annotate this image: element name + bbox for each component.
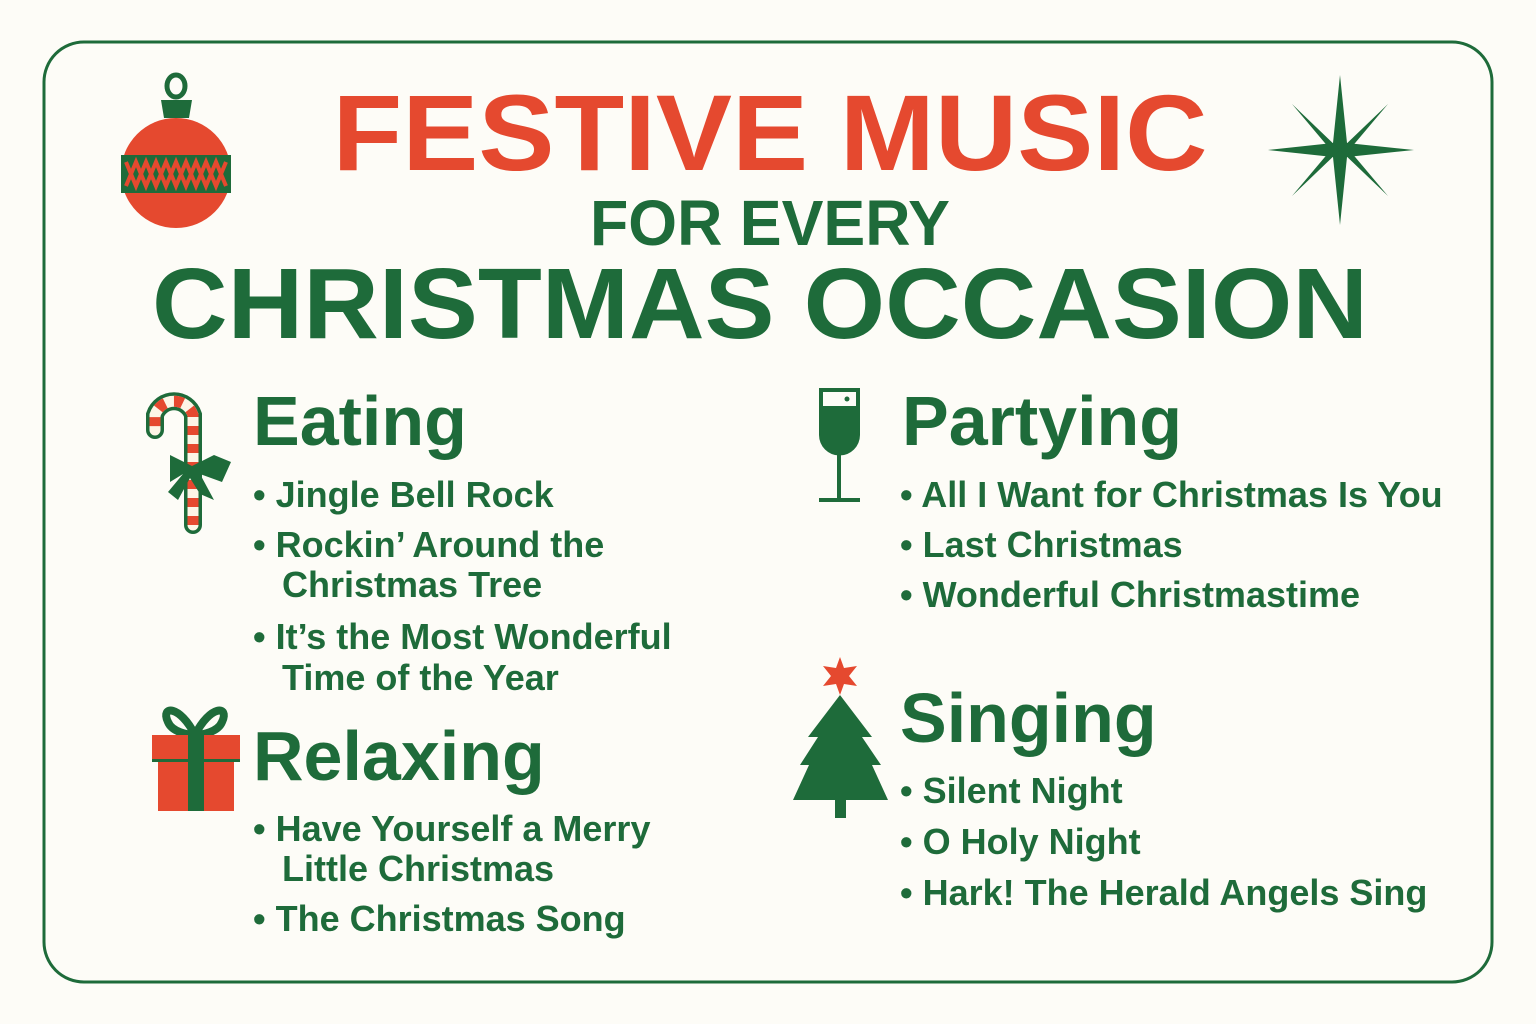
section: Relaxing: • Have Yourself a Merry (253, 808, 650, 849)
section: Partying: • Last Christmas (900, 524, 1183, 565)
title (152, 72, 1368, 360)
section: Eating: Time of the Year (282, 657, 559, 698)
section: Relaxing: • The Christmas Song (253, 898, 626, 939)
section: Eating (253, 382, 672, 698)
section: Relaxing: Relaxing (253, 717, 545, 795)
title: FESTIVE MUSIC (332, 72, 1208, 193)
section: Relaxing (253, 717, 650, 939)
icon: ornament (121, 75, 231, 228)
section: Singing: • Silent Night (900, 770, 1123, 811)
section: Eating: Eating (253, 382, 467, 460)
section: Eating: Christmas Tree (282, 564, 542, 605)
section: Eating: • Jingle Bell Rock (253, 474, 555, 515)
section: Eating: • Rockin’ Around the (253, 524, 604, 565)
section: Singing (900, 679, 1427, 913)
section: Singing: • O Holy Night (900, 821, 1141, 862)
icon: champagne glass (819, 388, 860, 502)
section: Singing: • Hark! The Herald Angels Sing (900, 872, 1427, 913)
section: Partying: Partying (902, 382, 1182, 460)
title: FOR EVERY (590, 187, 950, 259)
icon: gift (152, 711, 240, 811)
section: Partying: • Wonderful Christmastime (900, 574, 1360, 615)
icon: star (1268, 75, 1414, 225)
icon: candy cane (155, 401, 231, 525)
section: Eating: • It’s the Most Wonderful (253, 616, 672, 657)
section: Partying: • All I Want for Christmas Is You (900, 474, 1443, 515)
title: CHRISTMAS OCCASION (152, 248, 1368, 360)
section: Relaxing: Little Christmas (282, 848, 554, 889)
icon: tree (793, 657, 888, 818)
section: Partying (900, 382, 1443, 615)
section: Singing: Singing (900, 679, 1157, 757)
